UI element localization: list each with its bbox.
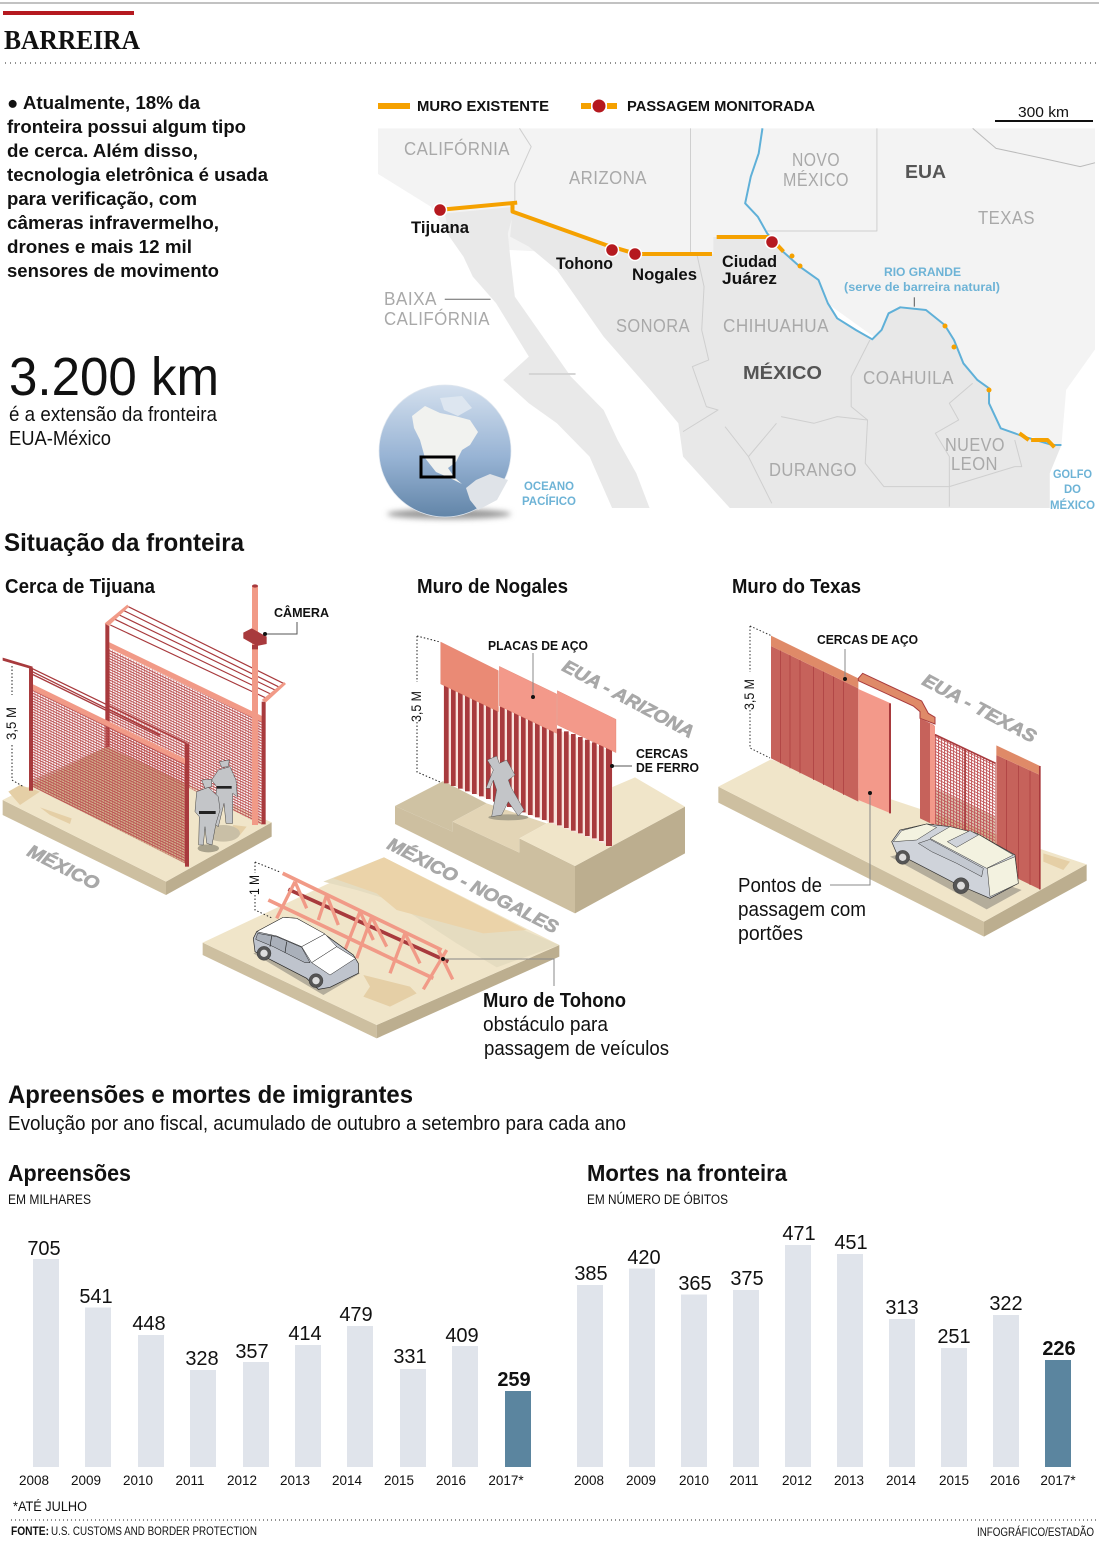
label: EUA - Arizona: EUA - ARIZONA	[559, 656, 697, 742]
subheading: Texas: Muro do Texas	[732, 576, 861, 598]
source: U.S. CUSTOMS AND BORDER PROTECTION	[51, 1526, 257, 1538]
existing wall lines	[445, 203, 1054, 447]
heading: fence situation: Situação da fronteira	[4, 529, 245, 557]
bar chart: seizures: 2012	[227, 1473, 257, 1488]
bar chart: deaths	[574, 1223, 1076, 1488]
illustration: Texas wall	[718, 636, 1087, 937]
labels Texas: Pontos de	[738, 875, 822, 897]
state lines	[445, 128, 1099, 507]
labels Nogales	[488, 638, 699, 775]
bar chart: seizures: 414	[288, 1323, 322, 1345]
map legend: MURO EXISTENTE	[417, 98, 549, 115]
key figure: 3.200 km: 3.200 km	[9, 347, 219, 407]
barrier	[268, 873, 453, 989]
back fence	[108, 648, 262, 825]
water labels: (serve de barreira natural)	[844, 280, 1000, 294]
guards	[207, 825, 240, 842]
bar chart: deaths: 451	[834, 1232, 868, 1254]
bar chart: seizures: 2010	[123, 1473, 153, 1488]
globe locator	[379, 385, 511, 519]
bar chart: deaths: 2016	[990, 1473, 1020, 1488]
bar chart: deaths: 313	[885, 1297, 919, 1319]
small wall segments	[790, 254, 992, 392]
bar chart: seizures: 2014	[332, 1473, 363, 1488]
steel wall left	[771, 646, 858, 802]
source: FONTE:	[11, 1526, 49, 1538]
map scale: 300 km	[1018, 104, 1069, 121]
state and country labels: NOVO	[792, 150, 840, 170]
bar chart: deaths: 2014	[886, 1473, 917, 1488]
state and country labels: ARIZONA	[569, 168, 647, 188]
steel plates	[441, 642, 498, 712]
map: border region	[377, 128, 1099, 523]
bar chart: deaths: 2013	[834, 1473, 864, 1488]
bar chart: seizures: 479	[339, 1304, 373, 1326]
bar chart: seizures: 448	[132, 1313, 166, 1335]
camera label: CÂMERA	[274, 605, 330, 620]
labels Texas	[738, 632, 918, 945]
chart heading: deaths: EM NÚMERO DE ÓBITOS	[587, 1192, 728, 1207]
bar chart: deaths: 2008	[574, 1473, 604, 1488]
water labels: DO	[1064, 482, 1081, 496]
key figure: 3.200 km: EUA-México	[9, 428, 111, 450]
label: Mexico: MÉXICO	[24, 840, 103, 894]
bar chart: deaths: 322	[989, 1293, 1023, 1315]
bar chart: seizures: 2011	[175, 1473, 205, 1488]
header rules	[0, 2, 1099, 15]
intro text block: câmeras infravermelho,	[7, 212, 219, 233]
bar chart: seizures: 2017*	[488, 1473, 524, 1488]
bar chart: deaths: 375	[730, 1268, 764, 1290]
labels Nogales: PLACAS DE AÇO	[488, 638, 588, 653]
water labels: RIO GRANDE	[884, 265, 961, 279]
bar chart: seizures: 409	[445, 1325, 479, 1347]
bar chart: deaths: 385	[574, 1263, 608, 1285]
USA land	[377, 128, 1099, 445]
height marker Texas: 3,5 M	[741, 679, 757, 710]
bar chart: seizures: 2013	[280, 1473, 310, 1488]
intro text block: drones e mais 12 mil	[7, 236, 192, 257]
subheading: Nogales: Muro de Nogales	[417, 576, 568, 598]
state and country labels: NUEVO	[945, 435, 1005, 455]
camera pole	[252, 586, 258, 825]
state and country labels: TEXAS	[978, 208, 1035, 228]
state and country labels: EUA	[905, 162, 946, 182]
key figure: 3.200 km	[9, 347, 219, 450]
chart heading: seizures	[8, 1160, 131, 1207]
state and country labels: DURANGO	[769, 460, 857, 480]
bar chart: deaths: 2012	[782, 1473, 812, 1488]
bar chart: seizures: 328	[185, 1348, 219, 1370]
chart heading: deaths: Mortes na fronteira	[587, 1160, 787, 1186]
labels Texas: passagem com	[738, 899, 866, 921]
Tohono callout: obstáculo para	[483, 1014, 609, 1036]
bar chart: deaths: 2010	[679, 1473, 709, 1488]
title: BARREIRA	[4, 25, 140, 55]
bar chart: deaths: 251	[937, 1326, 971, 1348]
bar chart: seizures: 705	[27, 1238, 61, 1260]
intro text block: ● Atualmente, 18% da	[7, 92, 201, 113]
right wall section and mesh	[920, 718, 934, 825]
bar chart: seizures: 2009	[71, 1473, 101, 1488]
illustration: Tohono barrier	[203, 857, 559, 1038]
intro text block: tecnologia eletrônica é usada	[7, 164, 269, 185]
bar chart: deaths: 226	[1042, 1338, 1076, 1360]
Tohono callout: Muro de Tohono	[483, 990, 626, 1012]
subtitle: Evolução por ano fiscal, acumulado de outubro a setembro para cada ano	[8, 1113, 626, 1135]
water labels: GOLFO	[1053, 467, 1092, 481]
state and country labels: CALIFÓRNIA	[404, 138, 510, 159]
bar chart: deaths: 2015	[939, 1473, 969, 1488]
Mexico land	[510, 212, 1061, 523]
front fence	[32, 747, 185, 863]
bar chart: deaths: 471	[782, 1223, 816, 1245]
bar chart: deaths: 2011	[729, 1473, 759, 1488]
bar chart: seizures: 2008	[19, 1473, 49, 1488]
subheading: Tijuana: Cerca de Tijuana	[5, 576, 156, 598]
bar chart: seizures: 259	[497, 1369, 531, 1391]
Tohono callout	[441, 957, 669, 1060]
illustration: Tijuana fence	[3, 584, 286, 895]
bar chart: deaths: 2009	[626, 1473, 656, 1488]
gate	[858, 689, 891, 813]
intro text block: para verificação, com	[7, 188, 197, 209]
state and country labels	[384, 138, 1035, 480]
water labels: PACÍFICO	[522, 493, 576, 508]
shadow	[890, 852, 1022, 909]
iron fence bars	[443, 685, 612, 847]
SUV	[892, 824, 1018, 898]
bar chart: seizures: 357	[235, 1341, 269, 1363]
bar chart: seizures: 331	[393, 1346, 427, 1368]
Tohono callout: passagem de veículos	[484, 1038, 669, 1060]
label: EUA - Texas: EUA - TEXAS	[919, 670, 1040, 747]
bar chart: seizures: 541	[79, 1286, 113, 1308]
state and country labels: LEON	[951, 454, 998, 474]
Rio Grande river	[745, 128, 1061, 445]
height marker Tijuana	[3, 666, 24, 787]
city labels: Tijuana	[411, 218, 470, 237]
state and country labels: SONORA	[616, 316, 690, 336]
camera label	[263, 605, 330, 636]
map legend	[378, 98, 815, 115]
city labels: Juárez	[722, 269, 777, 288]
migrant	[488, 814, 528, 820]
city labels: Tohono	[556, 254, 613, 273]
bar chart: seizures: 2015	[384, 1473, 414, 1488]
bar chart: seizures: 2016	[436, 1473, 466, 1488]
height marker Texas	[741, 626, 772, 758]
map scale	[995, 104, 1093, 122]
state and country labels: MÉXICO	[743, 362, 822, 383]
height marker Nogales	[408, 636, 440, 782]
footnote: *ATÉ JULHO	[13, 1499, 87, 1514]
intro text block: de cerca. Além disso,	[7, 140, 198, 161]
key figure: 3.200 km: é a extensão da fronteira	[9, 404, 218, 426]
map legend: PASSAGEM MONITORADA	[627, 98, 815, 115]
car	[253, 947, 360, 995]
Baja California	[445, 207, 650, 510]
state and country labels: MÉXICO	[783, 170, 849, 190]
monitored crossing markers	[434, 204, 778, 260]
state and country labels: BAIXA	[384, 289, 437, 309]
height marker Nogales: 3,5 M	[408, 691, 424, 722]
bar chart: deaths: 420	[627, 1247, 661, 1269]
labels Nogales: CERCAS	[636, 746, 688, 761]
city labels: Ciudad	[722, 252, 777, 271]
state and country labels: CHIHUAHUA	[723, 316, 829, 336]
illustration: Nogales wall	[395, 642, 685, 913]
intro text block: fronteira possui algum tipo	[7, 116, 246, 137]
height marker Tohono	[246, 862, 280, 918]
height marker Tohono: 1 M	[246, 875, 262, 895]
labels Nogales: DE FERRO	[636, 760, 699, 775]
labels Texas: portões	[738, 923, 803, 945]
label: Mexico - Nogales: MÉXICO - NOGALES	[384, 833, 562, 937]
labels Texas: CERCAS DE AÇO	[817, 632, 918, 647]
water labels	[522, 265, 1095, 512]
city labels: Nogales	[632, 265, 697, 284]
chart heading: seizures: EM MILHARES	[8, 1192, 91, 1207]
bar chart: deaths: 2017*	[1040, 1473, 1076, 1488]
bar chart: seizures	[19, 1238, 531, 1488]
chart heading: deaths	[587, 1160, 787, 1207]
water labels: OCEANO	[524, 479, 574, 493]
height marker Tijuana: 3,5 M	[3, 707, 19, 740]
heading: seizures and deaths: Apreensões e mortes de imigrantes	[8, 1081, 413, 1109]
bar chart: deaths: 365	[678, 1273, 712, 1295]
city labels	[411, 218, 777, 288]
state and country labels: CALIFÓRNIA	[384, 308, 490, 329]
chart heading: seizures: Apreensões	[8, 1160, 131, 1186]
water labels: MÉXICO	[1050, 497, 1095, 512]
state and country labels: COAHUILA	[863, 368, 954, 388]
intro text block	[7, 92, 269, 281]
intro text block: sensores de movimento	[7, 260, 219, 281]
